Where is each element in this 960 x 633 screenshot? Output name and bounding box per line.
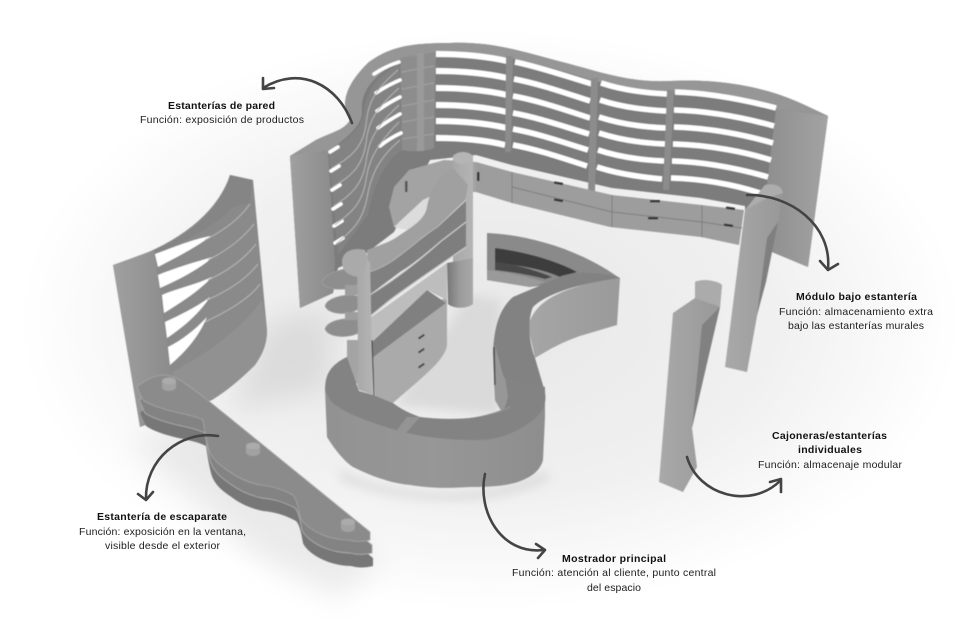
- arrow: module: [747, 195, 838, 270]
- left end panel: [290, 150, 335, 308]
- corner shelves post: [400, 52, 436, 151]
- inner curved cabinet: [389, 160, 476, 227]
- shelf pegs: [162, 378, 355, 532]
- shelf openings section 3: [597, 83, 667, 179]
- cabinet handles: [418, 334, 425, 369]
- panel: individual drawers tower: [659, 280, 722, 492]
- counter top band: [325, 357, 545, 440]
- small tower slot: [692, 307, 720, 428]
- tower body: [725, 184, 783, 372]
- label: wall shelving: [140, 100, 304, 126]
- panel: curved display shelf on left: [113, 175, 267, 427]
- label: window shelf: visible desde el exterior: [105, 540, 220, 552]
- shelf openings section 4: [671, 92, 776, 193]
- small tower cap: [695, 280, 722, 307]
- panel: window display shelf: [137, 375, 373, 568]
- wall shelving body: [290, 43, 828, 308]
- left curved shelves: [329, 64, 402, 255]
- top shelf surface: [137, 375, 370, 542]
- label: main counter: del espacio: [587, 582, 641, 594]
- arrow: wall shelving: [263, 78, 352, 123]
- back column cap: [453, 152, 473, 164]
- right end panel: [765, 109, 828, 267]
- shelf openings section 2: [513, 62, 592, 166]
- panel: central island shelving: [322, 152, 473, 403]
- label: main counter: [512, 553, 716, 594]
- back column: [453, 155, 473, 270]
- small tower body: [659, 280, 722, 492]
- small shelf back column: [345, 285, 359, 320]
- lobe lighter face: [528, 277, 620, 358]
- label: individual drawers: Función: almacenaje modular: [758, 459, 902, 471]
- label: module under shelf: Módulo bajo estantería: [796, 291, 917, 303]
- label: individual drawers: Cajoneras/estanterías: [772, 430, 887, 442]
- label: window shelf: Estantería de escaparate: [97, 511, 227, 523]
- top band of wall: [290, 43, 828, 156]
- light gap: [370, 263, 447, 342]
- arrow: drawers: [687, 457, 781, 496]
- panel: module under shelf tower: [725, 184, 783, 372]
- label: individual drawers: [758, 430, 902, 471]
- small round shelves: [322, 268, 360, 337]
- shelf openings section 1: [436, 54, 507, 145]
- drawers lower face: [476, 162, 744, 245]
- counter front face: [325, 390, 545, 488]
- cabinet top dark: [372, 290, 446, 358]
- panel: wall shelving unit: [290, 43, 828, 308]
- vertical dividers: [505, 56, 674, 192]
- label: individual drawers: individuales: [798, 444, 862, 456]
- label: wall shelving: Estanterías de pared: [168, 100, 275, 112]
- tower cap: [745, 184, 783, 210]
- lower shelf layer 3: [140, 401, 373, 568]
- label: module under shelf: [779, 291, 933, 332]
- drawer handles: [477, 172, 735, 227]
- left display side panel: [113, 250, 175, 427]
- left display base: [172, 300, 267, 400]
- lower shelf layer 2: [139, 388, 372, 554]
- label: main counter: Mostrador principal: [562, 553, 666, 565]
- left display openings: [155, 236, 213, 365]
- panel: main counter front: [325, 357, 545, 488]
- label: module under shelf: Función: almacenamiento extra: [779, 306, 933, 318]
- label: window shelf: Función: exposición en la ventana,: [79, 526, 246, 538]
- shelf bands: [368, 200, 466, 296]
- label: window shelf: [79, 511, 246, 552]
- tower slot: [757, 222, 778, 315]
- label: module under shelf: bajo las estanterías murales: [788, 320, 924, 332]
- left display shelf edges: [205, 204, 260, 322]
- island cabinet: [372, 298, 447, 403]
- arrow: counter: [483, 474, 545, 558]
- label: main counter: Función: atención al cliente, punto central: [512, 567, 716, 579]
- back panel with dark slots: [487, 233, 618, 287]
- label: wall shelving: Función: exposición de productos: [140, 114, 304, 126]
- panel: main counter back lobe: [487, 233, 620, 417]
- front column: [357, 258, 373, 395]
- top shelf surface: [367, 168, 468, 272]
- front column cap: [342, 249, 368, 277]
- left display body: [113, 175, 267, 427]
- lobe top band: [493, 273, 620, 417]
- arrow: window shelf: [138, 435, 218, 500]
- left display top band: [154, 175, 253, 254]
